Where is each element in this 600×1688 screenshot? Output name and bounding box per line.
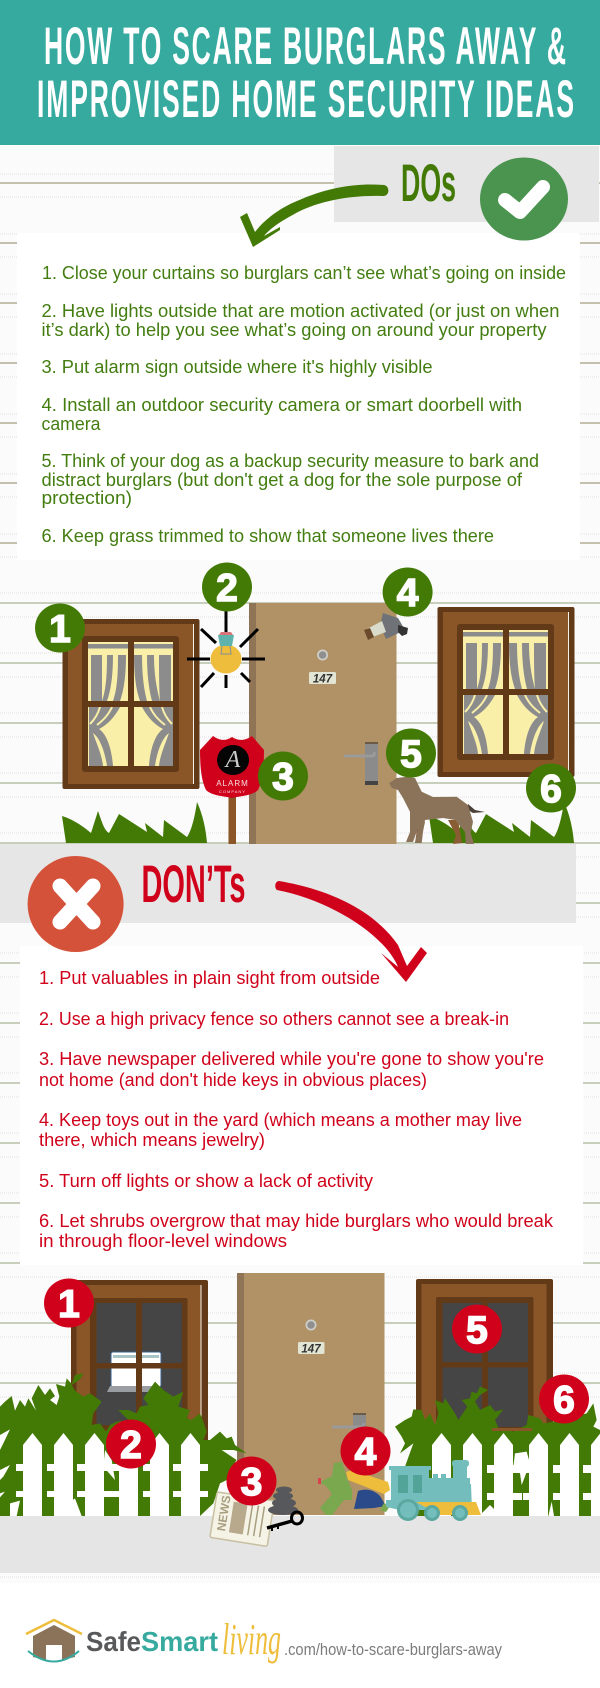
icon: red X circle [28, 856, 124, 952]
text block: DOs list [42, 263, 566, 546]
number badges: DOs scene: 1 [49, 608, 71, 651]
number badges: DON'Ts scene: 4 [355, 1431, 377, 1474]
number badges: DOs scene: 2 [216, 567, 238, 610]
window left with laptop [71, 1280, 208, 1450]
icon: dog [389, 777, 485, 845]
number badges: DON'Ts scene: 2 [120, 1424, 142, 1467]
icon: green check circle [480, 158, 568, 240]
number badges: DON'Ts scene: 5 [466, 1309, 488, 1352]
icon: alarm sign: ALARM [216, 779, 249, 788]
text block: DON'Ts list: 6. Let shrubs overgrow that may hide burglars who would break [39, 1211, 554, 1231]
grass left [62, 802, 207, 843]
text block: DOs list: 1. Close your curtains so burglars can’t see what’s going on inside [42, 263, 566, 283]
icon: laptop [107, 1352, 161, 1392]
panel: DOs heading band [334, 146, 599, 222]
brand name: Safe [86, 1626, 141, 1657]
icon: house logo [26, 1620, 82, 1662]
number badges: DON'Ts scene: 3 [241, 1461, 262, 1504]
door: 147 [301, 1344, 321, 1356]
icon: security camera [364, 613, 408, 640]
icon: key [267, 1512, 302, 1531]
icon: newspaper: NEWS [214, 1494, 234, 1532]
title [37, 16, 574, 128]
text block: DOs list: 4. Install an outdoor security camera or smart doorbell with [42, 395, 522, 415]
text block: DON'Ts list: not home (and don't hide keys in obvious places) [39, 1070, 427, 1090]
text block: DOs list: distract burglars (but don't get a dog for the sole purpose of [42, 470, 523, 490]
text block: DOs list: 3. Put alarm sign outside where it's highly visible [42, 357, 432, 377]
title: IMPROVISED HOME SECURITY IDEAS [37, 69, 574, 128]
text block: DOs list: it’s dark) to help you see what’s going on around your property [42, 320, 546, 340]
brand name: Smart [141, 1626, 218, 1657]
door [237, 1273, 384, 1515]
door: 147 [313, 674, 333, 686]
icon: alarm sign: COMPANY [219, 789, 246, 794]
door [249, 603, 396, 844]
text block: DON'Ts list: in through floor-level windows [39, 1231, 287, 1251]
scene: DOs house front [62, 603, 574, 845]
arrow: DON'Ts to list [275, 881, 427, 982]
window right [438, 607, 574, 777]
panel: DON'Ts list background [20, 946, 583, 1265]
number badges: DOs scene: 4 [397, 572, 419, 615]
text block: DON'Ts list: 1. Put valuables in plain sight from outside [39, 968, 380, 988]
icon: newspaper [210, 1492, 274, 1546]
number badges: DOs scene: 5 [400, 733, 422, 776]
number badges: DON'Ts scene [44, 1278, 589, 1506]
title: HOW TO SCARE BURGLARS AWAY & [44, 16, 566, 75]
shrub left [0, 1373, 247, 1516]
number badges: DON'Ts scene: 1 [58, 1283, 80, 1326]
text block: DOs list: 5. Think of your dog as a backup security measure to bark and [42, 451, 539, 471]
text block: DOs list: camera [42, 414, 101, 434]
window left [62, 619, 200, 789]
number badges: DOs scene [35, 562, 576, 812]
text block: DOs list: 2. Have lights outside that are motion activated (or just on when [42, 301, 560, 321]
ground [0, 1516, 600, 1573]
url: .com/how-to-scare-burglars-away [284, 1640, 502, 1659]
text block: DON'Ts list: 4. Keep toys out in the yard (which means a mother may live [39, 1110, 522, 1130]
heading: DOs: DOs [401, 154, 456, 213]
header banner [0, 0, 600, 145]
window right [416, 1279, 553, 1449]
text block: DON'Ts list: 5. Turn off lights or show a lack of activity [39, 1171, 373, 1191]
icon: alarm sign: A [224, 747, 241, 773]
brand script: living: living [222, 1615, 281, 1664]
footer logo [26, 1615, 502, 1664]
grass right [429, 802, 574, 843]
icon: toys [318, 1462, 390, 1515]
text block: DON'Ts list: 2. Use a high privacy fence so others cannot see a break-in [39, 1009, 509, 1029]
number badges: DOs scene: 6 [540, 768, 562, 811]
text block: DON'Ts list [39, 968, 554, 1251]
panel: DOs list background [17, 233, 580, 560]
icon: toy train [386, 1460, 481, 1521]
shrub right [395, 1387, 600, 1517]
window sill right [492, 1428, 532, 1431]
arrow: DOs to list [240, 184, 388, 247]
scene: DON'Ts house front [0, 1273, 600, 1573]
fence left [16, 1433, 208, 1516]
text block: DOs list: protection) [42, 488, 132, 508]
icon: alarm sign [200, 736, 264, 844]
icon: stones [268, 1486, 298, 1515]
brand name [86, 1626, 218, 1657]
text block: DOs list: 6. Keep grass trimmed to show that someone lives there [42, 526, 494, 546]
panel: DON'Ts heading band [0, 844, 576, 923]
icon: light bulb [187, 610, 265, 688]
number badges: DOs scene: 3 [272, 756, 294, 799]
text block: DON'Ts list: there, which means jewelry) [39, 1130, 265, 1150]
text block: DON'Ts list: 3. Have newspaper delivered while you're gone to show you're [39, 1049, 544, 1069]
heading: DON'Ts: DON’Ts [142, 855, 246, 914]
number badges: DON'Ts scene: 6 [553, 1379, 575, 1422]
fence right [432, 1433, 600, 1516]
